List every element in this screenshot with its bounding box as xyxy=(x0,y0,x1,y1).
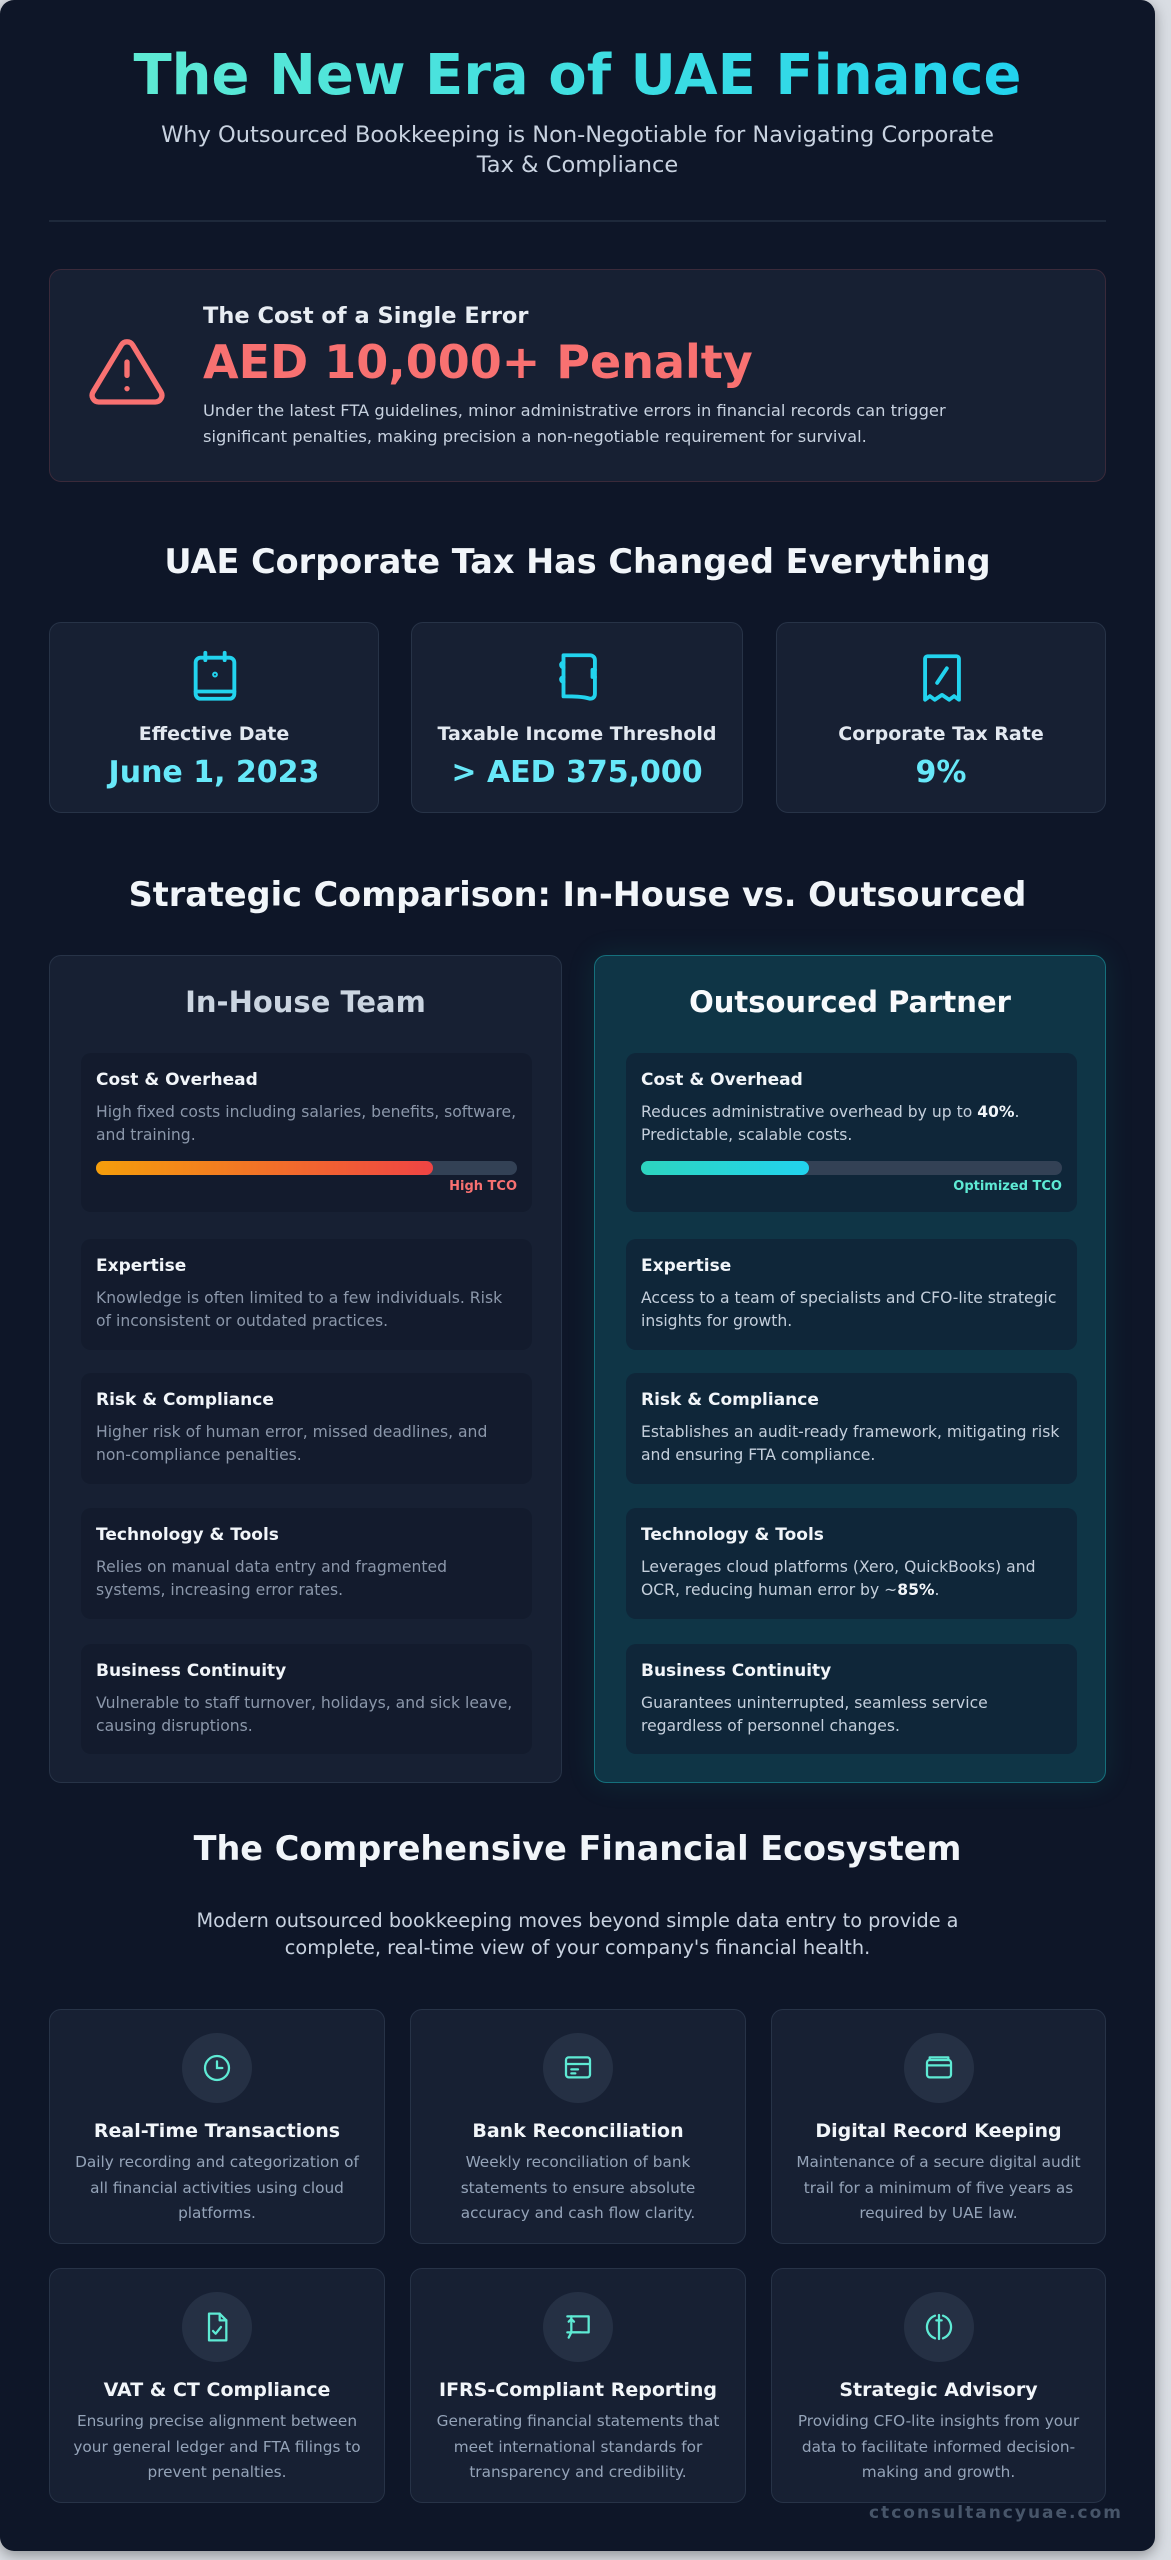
alert text: The Cost of a Single Error xyxy=(203,303,528,329)
item: expertise xyxy=(81,1239,532,1350)
icon: presentation xyxy=(543,2292,613,2362)
alert text xyxy=(203,303,946,446)
item: expertise: Expertise xyxy=(641,1256,731,1276)
card: bank: Weekly reconciliation of bank statements to ensure absolute accuracy and cash flow clarity. xyxy=(461,2153,695,2222)
item: risk xyxy=(81,1373,532,1484)
icon: warning triangle xyxy=(89,339,165,405)
item: cost: High TCO xyxy=(449,1179,517,1194)
column title: Outsourced Partner xyxy=(689,985,1011,1019)
icon: clock xyxy=(182,2033,252,2103)
alert text: AED 10,000+ Penalty xyxy=(203,335,753,389)
stat card: threshold xyxy=(411,622,743,813)
item: technology: Leverages cloud platforms (Xero, QuickBooks) and OCR, reducing human error by ~85%. xyxy=(641,1558,1035,1599)
item: cost xyxy=(81,1053,532,1212)
card: real-time: Real-Time Transactions xyxy=(94,2120,340,2142)
stat card: threshold: Taxable Income Threshold xyxy=(438,723,716,745)
icon: calendar xyxy=(194,650,236,701)
bar: optimized tco xyxy=(641,1161,1062,1175)
icon: compass xyxy=(904,2292,974,2362)
item: risk: Risk & Compliance xyxy=(641,1390,819,1410)
item: expertise: Knowledge is often limited to a few individuals. Risk of inconsistent or outdated practices. xyxy=(96,1289,502,1330)
item: technology xyxy=(626,1508,1077,1619)
item: cost: Cost & Overhead xyxy=(641,1070,803,1090)
card: ifrs: Generating financial statements that meet international standards for transparency and credibility. xyxy=(437,2412,719,2481)
item: technology: Technology & Tools xyxy=(96,1525,279,1545)
item: continuity: Business Continuity xyxy=(641,1661,831,1681)
icon: file check xyxy=(182,2292,252,2362)
stat card: tax rate: Corporate Tax Rate xyxy=(838,723,1044,745)
item: risk xyxy=(626,1373,1077,1484)
icon: receipt xyxy=(923,654,961,702)
item: expertise xyxy=(626,1239,1077,1350)
panel: in-house xyxy=(49,955,562,1783)
item: continuity: Guarantees uninterrupted, seamless service regardless of personnel changes. xyxy=(641,1694,988,1735)
card: bank xyxy=(410,2009,746,2244)
subtitle: Why Outsourced Bookkeeping is Non-Negotiable for Navigating Corporate Tax & Compliance xyxy=(161,122,994,178)
stat card: threshold: > AED 375,000 xyxy=(451,755,703,790)
stat card: tax rate xyxy=(776,622,1106,813)
stat card: effective date xyxy=(49,622,379,813)
item: risk: Establishes an audit-ready framework, mitigating risk and ensuring FTA compliance. xyxy=(641,1423,1059,1464)
stat card: effective date: June 1, 2023 xyxy=(109,755,319,790)
card: advisory: Providing CFO-lite insights from your data to facilitate informed decision-making and growth. xyxy=(798,2412,1079,2481)
card: ifrs xyxy=(410,2268,746,2503)
item: technology: Relies on manual data entry and fragmented systems, increasing error rates. xyxy=(96,1558,447,1599)
heading: corporate tax: UAE Corporate Tax Has Changed Everything xyxy=(164,542,991,581)
heading: ecosystem: The Comprehensive Financial Ecosystem xyxy=(194,1829,961,1868)
watermark: ctconsultancyuae.com xyxy=(869,2503,1123,2523)
card: real-time: Daily recording and categorization of all financial activities using cloud platforms. xyxy=(75,2153,359,2222)
alert text: Under the latest FTA guidelines, minor administrative errors in financial records can trigger significant penalties, making precision a non-negotiable requirement for survival. xyxy=(203,401,946,446)
item: continuity: Business Continuity xyxy=(96,1661,286,1681)
card: advisory: Strategic Advisory xyxy=(839,2379,1038,2401)
item: expertise: Expertise xyxy=(96,1256,186,1276)
card: ifrs: IFRS-Compliant Reporting xyxy=(439,2379,717,2401)
stat card: effective date: Effective Date xyxy=(139,723,289,745)
ecosystem intro: Modern outsourced bookkeeping moves beyond simple data entry to provide a complete, real-time view of your company's financial health. xyxy=(196,1909,959,1959)
item: cost xyxy=(626,1053,1077,1212)
column title: In-House Team xyxy=(185,985,426,1019)
item: continuity: Vulnerable to staff turnover, holidays, and sick leave, causing disruptions. xyxy=(96,1694,512,1735)
card: digital record xyxy=(771,2009,1106,2244)
bar: high tco xyxy=(96,1161,517,1175)
icon: scroll xyxy=(559,653,597,701)
item: expertise: Access to a team of specialists and CFO-lite strategic insights for growth. xyxy=(641,1289,1056,1330)
card: advisory xyxy=(771,2268,1106,2503)
item: cost: Reduces administrative overhead by up to 40%. Predictable, scalable costs. xyxy=(641,1103,1020,1144)
panel: outsourced xyxy=(594,955,1106,1783)
title: The New Era of UAE Finance xyxy=(133,43,1022,108)
card: digital record: Digital Record Keeping xyxy=(815,2120,1062,2142)
item: technology xyxy=(81,1508,532,1619)
card: real-time xyxy=(49,2009,385,2244)
stat card: tax rate: 9% xyxy=(916,755,966,790)
item: risk: Risk & Compliance xyxy=(96,1390,274,1410)
card: digital record: Maintenance of a secure digital audit trail for a minimum of five years as required by UAE law. xyxy=(796,2153,1081,2222)
card: bank: Bank Reconciliation xyxy=(472,2120,684,2142)
heading: comparison: Strategic Comparison: In-House vs. Outsourced xyxy=(129,875,1026,914)
item: cost: High fixed costs including salaries, benefits, software, and training. xyxy=(96,1103,516,1144)
item: technology: Technology & Tools xyxy=(641,1525,824,1545)
alert card xyxy=(49,269,1106,482)
card: vat xyxy=(49,2268,385,2503)
icon: card xyxy=(543,2033,613,2103)
card: vat: Ensuring precise alignment between your general ledger and FTA filings to prevent penalties. xyxy=(73,2412,361,2481)
icon: folder xyxy=(904,2033,974,2103)
item: cost: Cost & Overhead xyxy=(96,1070,258,1090)
card: vat: VAT & CT Compliance xyxy=(104,2379,330,2401)
item: continuity xyxy=(626,1644,1077,1754)
item: risk: Higher risk of human error, missed deadlines, and non-compliance penalties. xyxy=(96,1423,487,1464)
item: cost: Optimized TCO xyxy=(953,1179,1062,1194)
item: continuity xyxy=(81,1644,532,1754)
